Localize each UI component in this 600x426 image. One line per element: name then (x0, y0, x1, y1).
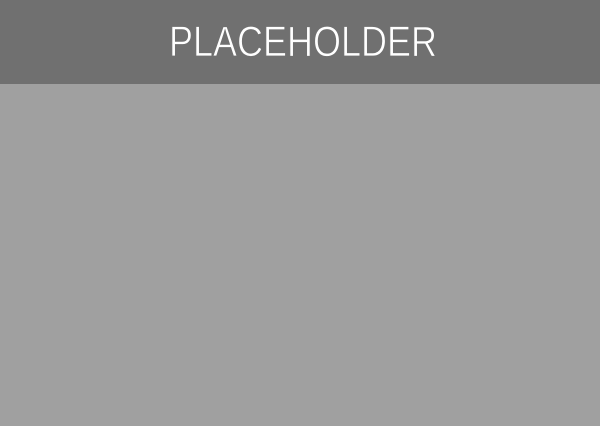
panel: header band (0, 0, 600, 84)
title: PLACEHOLDER (169, 19, 437, 66)
